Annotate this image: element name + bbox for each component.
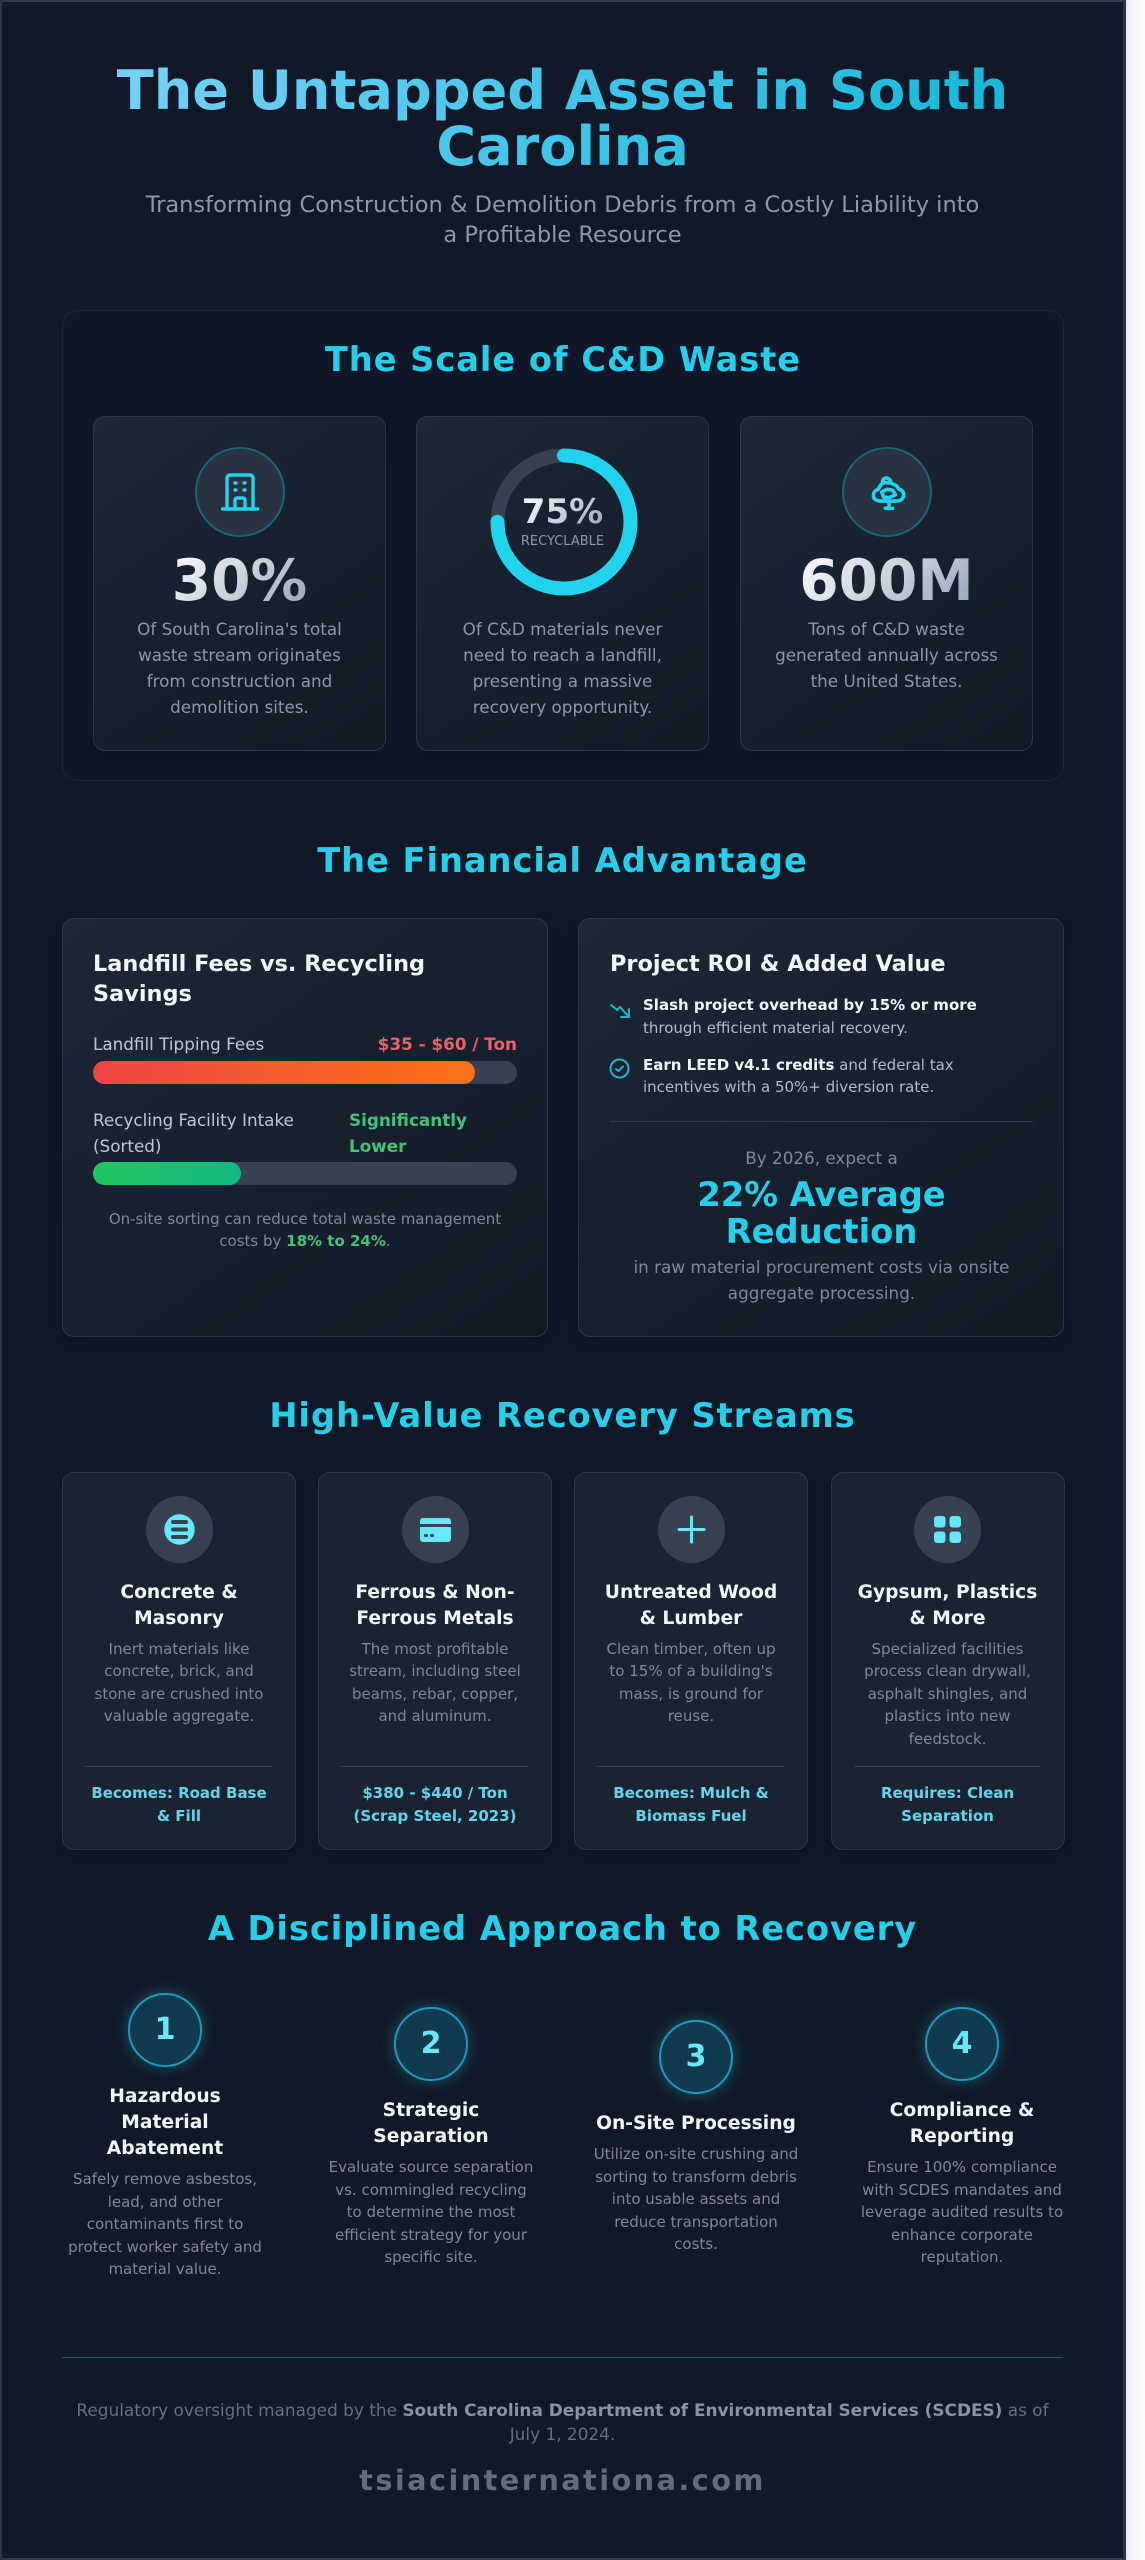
step description: Ensure 100% compliance bbox=[867, 2158, 1057, 2176]
step 2 bbox=[329, 2000, 533, 2266]
card: 30 percent stat bbox=[93, 416, 386, 751]
description: 600M: generated annually across bbox=[775, 645, 998, 665]
step description bbox=[594, 2145, 798, 2253]
title: The Untapped Asset in South bbox=[117, 59, 1008, 122]
note: savings: costs by 18% to 24%. bbox=[219, 1232, 391, 1250]
step title: Material bbox=[121, 2112, 209, 2132]
ring value: 75%: 75% bbox=[522, 492, 603, 532]
step description: material value. bbox=[108, 2260, 222, 2278]
description: and aluminum. bbox=[378, 1707, 492, 1725]
footer: regulatory note: Regulatory oversight managed by the South Carolina Department of Environmental Services (SCDES) as of bbox=[76, 2400, 1049, 2420]
step description: reputation. bbox=[921, 2248, 1003, 2266]
panel: project ROI and added value bbox=[578, 918, 1064, 1337]
panel heading: Project ROI & Added Value bbox=[610, 951, 946, 977]
outcome: Becomes: Mulch & bbox=[613, 1784, 769, 1802]
step title: Hazardous bbox=[109, 2086, 221, 2106]
value: significantly lower: Lower bbox=[349, 1136, 406, 1156]
icon: grid bbox=[914, 1496, 981, 1563]
description: beams, rebar, copper, bbox=[352, 1685, 518, 1703]
bullet: overhead: Slash project overhead by 15% or more bbox=[643, 996, 977, 1014]
description: plastics into new bbox=[884, 1707, 1011, 1725]
description: valuable aggregate. bbox=[104, 1707, 254, 1725]
description: Inert materials like bbox=[109, 1640, 249, 1658]
outcome bbox=[91, 1784, 267, 1825]
label: recycling facility intake bbox=[93, 1110, 294, 1156]
callout figure: 22% Average bbox=[697, 1174, 946, 1214]
step 1 bbox=[68, 1986, 262, 2278]
icon: building bbox=[194, 447, 284, 537]
title bbox=[858, 1582, 1037, 1628]
note: savings: On-site sorting can reduce total waste management bbox=[109, 1210, 501, 1228]
value: significantly lower: Significantly bbox=[349, 1110, 467, 1130]
card: concrete and masonry bbox=[62, 1472, 296, 1850]
step description: Utilize on-site crushing and bbox=[594, 2145, 798, 2163]
bullet: overhead: through efficient material recovery. bbox=[643, 1019, 908, 1037]
step title: Compliance & bbox=[890, 2100, 1034, 2120]
icon: wood plus bbox=[658, 1496, 724, 1563]
step title: Strategic bbox=[383, 2100, 479, 2120]
heading: disciplined approach: A Disciplined Approach to Recovery bbox=[208, 1909, 917, 1948]
description: stone are crushed into bbox=[95, 1685, 263, 1703]
description: The most profitable bbox=[362, 1640, 508, 1658]
description: 600M: Tons of C&D waste bbox=[808, 618, 965, 638]
step description: lead, and other bbox=[108, 2193, 222, 2211]
card: gypsum, plastics and more bbox=[830, 1472, 1064, 1850]
outcome: $380 - $440 / Ton bbox=[362, 1784, 508, 1802]
icon: trending down bbox=[610, 1004, 630, 1018]
title: Ferrous Metals bbox=[356, 1608, 514, 1628]
title: Ferrous & Non- bbox=[355, 1582, 515, 1602]
description bbox=[606, 1640, 776, 1725]
step description: enhance corporate bbox=[891, 2226, 1033, 2244]
heading: high-value recovery streams: High-Value Recovery Streams bbox=[269, 1396, 856, 1434]
title: & More bbox=[909, 1608, 986, 1628]
step description: contaminants first to bbox=[87, 2215, 243, 2233]
description: 75 percent bbox=[463, 618, 662, 717]
subtitle: a Profitable Resource bbox=[443, 222, 682, 248]
outcome: Requires: Clean bbox=[881, 1784, 1014, 1802]
title: Concrete & bbox=[120, 1582, 238, 1602]
icon: check circle bbox=[610, 1058, 630, 1078]
description: process clean drywall, bbox=[864, 1662, 1031, 1680]
step description bbox=[842, 2156, 1082, 2269]
title: & Lumber bbox=[640, 1608, 742, 1628]
panel heading bbox=[93, 951, 425, 1007]
footer: regulatory note bbox=[0, 2398, 1125, 2446]
stat: 30%: 30% bbox=[172, 548, 307, 614]
number badge 4: 4 bbox=[952, 2026, 972, 2061]
number badge 4 bbox=[925, 2007, 999, 2081]
step description bbox=[329, 2158, 533, 2266]
step description: into usable assets and bbox=[612, 2190, 780, 2208]
title bbox=[605, 1582, 777, 1628]
note: savings bbox=[109, 1210, 501, 1250]
callout figure: Reduction bbox=[726, 1212, 917, 1251]
step 3 bbox=[594, 2012, 798, 2253]
number badge 3: 3 bbox=[686, 2039, 706, 2074]
description: 30 percent: demolition sites. bbox=[170, 697, 309, 717]
panel heading: Landfill Fees vs. Recycling bbox=[93, 951, 425, 977]
ring label: RECYCLABLE bbox=[521, 534, 604, 549]
value: significantly lower bbox=[349, 1110, 467, 1156]
footer: website: tsiacinternationa.com bbox=[359, 2463, 766, 2497]
step description: reduce transportation bbox=[614, 2213, 778, 2231]
description: concrete, brick, and bbox=[104, 1662, 254, 1680]
number badge 2 bbox=[394, 2007, 468, 2081]
bullet: overhead bbox=[643, 996, 977, 1037]
description: reuse. bbox=[668, 1707, 714, 1725]
panel: the scale of C&D waste bbox=[62, 310, 1064, 781]
card: 600M stat bbox=[740, 416, 1033, 751]
outcome: (Scrap Steel, 2023) bbox=[353, 1807, 516, 1825]
title: Masonry bbox=[134, 1608, 224, 1628]
description: 600M bbox=[775, 618, 998, 691]
step title bbox=[106, 2086, 223, 2158]
subtitle bbox=[146, 192, 979, 248]
description: 30 percent bbox=[137, 618, 342, 717]
stat: 600M: 600M bbox=[799, 548, 974, 614]
callout: 22 percent reduction bbox=[610, 1121, 1033, 1311]
card: ferrous and non-ferrous metals bbox=[318, 1472, 552, 1850]
description: feedstock. bbox=[909, 1730, 986, 1748]
title: Gypsum, Plastics bbox=[858, 1582, 1037, 1602]
step description: Evaluate source separation bbox=[329, 2158, 533, 2176]
description: Clean timber, often up bbox=[606, 1640, 776, 1658]
label: recycling facility intake: Recycling Facility Intake bbox=[93, 1110, 294, 1130]
description: Specialized facilities bbox=[872, 1640, 1023, 1658]
outcome bbox=[881, 1784, 1014, 1825]
step title: On-Site Processing bbox=[596, 2112, 796, 2134]
description: 30 percent: Of South Carolina's total bbox=[137, 618, 342, 638]
description: 75 percent: need to reach a landfill, bbox=[463, 645, 662, 665]
heading: scale of waste: The Scale of C&D Waste bbox=[325, 340, 801, 378]
bullet: LEED bbox=[643, 1056, 954, 1096]
title bbox=[62, 63, 1063, 175]
callout intro: By 2026, expect a bbox=[745, 1148, 898, 1168]
number badge 3 bbox=[659, 2020, 733, 2094]
outcome: & Fill bbox=[157, 1807, 201, 1825]
panel: landfill fees vs recycling savings bbox=[62, 918, 548, 1337]
description: 30 percent: from construction and bbox=[147, 671, 332, 691]
description: asphalt shingles, and bbox=[868, 1685, 1027, 1703]
number badge 2: 2 bbox=[421, 2026, 441, 2061]
description: 600M: the United States. bbox=[811, 671, 962, 691]
step description: to determine the most bbox=[347, 2203, 515, 2221]
outcome: Biomass Fuel bbox=[635, 1807, 747, 1825]
callout caption: in raw material procurement costs via onsite bbox=[634, 1257, 1009, 1277]
step description: vs. commingled recycling bbox=[335, 2181, 527, 2199]
step description: protect worker safety and bbox=[68, 2238, 262, 2256]
description bbox=[349, 1640, 521, 1725]
outcome: Separation bbox=[901, 1807, 994, 1825]
subtitle: Transforming Construction & Demolition Debris from a Costly Liability into bbox=[146, 192, 979, 218]
step description bbox=[68, 2170, 262, 2278]
card: untreated wood and lumber bbox=[574, 1472, 808, 1850]
description: to 15% of a building's bbox=[609, 1662, 773, 1680]
description: 75 percent: presenting a massive bbox=[473, 671, 652, 691]
step description: specific site. bbox=[384, 2248, 478, 2266]
bullet: LEED: Earn LEED v4.1 credits and federal tax bbox=[643, 1056, 954, 1074]
step title: Abatement bbox=[107, 2138, 223, 2158]
step title: Separation bbox=[373, 2126, 489, 2146]
description: 75 percent: Of C&D materials never bbox=[463, 618, 662, 638]
description bbox=[95, 1640, 263, 1725]
step description: sorting to transform debris bbox=[595, 2168, 797, 2186]
bullet: LEED: incentives with a 50%+ diversion rate. bbox=[643, 1078, 934, 1096]
title: Untreated Wood bbox=[605, 1582, 777, 1602]
bar: recycling bbox=[93, 1162, 517, 1185]
donut chart: 75% bbox=[490, 448, 638, 596]
step 4 bbox=[861, 2000, 1063, 2266]
number badge 1: 1 bbox=[155, 2012, 175, 2047]
callout caption bbox=[634, 1257, 1009, 1303]
heading: financial advantage: The Financial Advantage bbox=[317, 841, 808, 880]
outcome bbox=[353, 1784, 516, 1825]
value: landfill fee range: $35 - $60 / Ton bbox=[378, 1034, 517, 1054]
step description: with SCDES mandates and bbox=[862, 2181, 1062, 2199]
icon: metals bbox=[402, 1496, 468, 1563]
title: Carolina bbox=[436, 115, 689, 178]
description: mass, is ground for bbox=[619, 1685, 763, 1703]
callout caption: aggregate processing. bbox=[728, 1283, 915, 1303]
outcome bbox=[613, 1784, 769, 1825]
bar: landfill bbox=[93, 1061, 517, 1084]
step description: costs. bbox=[674, 2235, 718, 2253]
step title: Reporting bbox=[910, 2126, 1014, 2146]
title bbox=[120, 1582, 238, 1628]
description: 75 percent: recovery opportunity. bbox=[473, 697, 652, 717]
icon: concrete bbox=[146, 1496, 212, 1563]
callout figure bbox=[697, 1174, 946, 1251]
panel heading: Savings bbox=[93, 981, 192, 1007]
step description: efficient strategy for your bbox=[335, 2226, 527, 2244]
step description: leverage audited results to bbox=[861, 2203, 1063, 2221]
outcome: Becomes: Road Base bbox=[91, 1784, 267, 1802]
number badge 1 bbox=[128, 1993, 202, 2067]
step title bbox=[890, 2100, 1034, 2146]
label: recycling facility intake: (Sorted) bbox=[93, 1136, 161, 1156]
label: landfill tipping fees: Landfill Tipping Fees bbox=[93, 1034, 264, 1054]
footer: regulatory note: July 1, 2024. bbox=[510, 2424, 615, 2444]
icon: debris pile bbox=[842, 447, 932, 537]
description: stream, including steel bbox=[349, 1662, 521, 1680]
step description: Safely remove asbestos, bbox=[73, 2170, 257, 2188]
description bbox=[864, 1640, 1031, 1748]
title bbox=[355, 1582, 515, 1628]
card: 75 percent recyclable ring bbox=[416, 416, 709, 751]
step title bbox=[373, 2100, 489, 2146]
description: 30 percent: waste stream originates bbox=[138, 645, 341, 665]
